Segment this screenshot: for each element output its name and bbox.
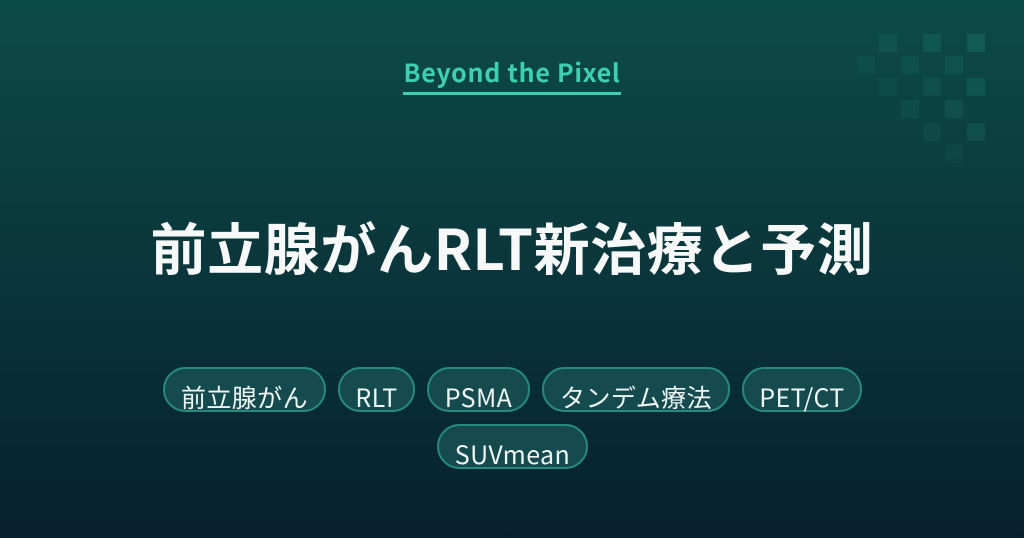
brand label: Beyond the Pixel: Beyond the Pixel — [403, 54, 620, 90]
title: 前立腺がんRLT新治療と予測 — [150, 206, 874, 287]
tag: RLT — [338, 367, 415, 412]
tag: PSMA: PSMA — [445, 379, 512, 415]
tag: 前立腺がん: 前立腺がん — [181, 379, 308, 415]
tag: SUVmean: SUVmean — [455, 436, 570, 472]
tag: タンデム療法: タンデム療法 — [560, 379, 712, 415]
tag: SUVmean — [437, 424, 588, 469]
tag: 前立腺がん — [163, 367, 326, 412]
tag: RLT: RLT — [355, 379, 398, 415]
tag: タンデム療法 — [542, 367, 730, 412]
tag: PET/CT: PET/CT — [759, 379, 845, 415]
tag: PSMA — [427, 367, 530, 412]
decorative pixel grid — [879, 34, 985, 141]
tag: PET/CT — [742, 367, 862, 412]
